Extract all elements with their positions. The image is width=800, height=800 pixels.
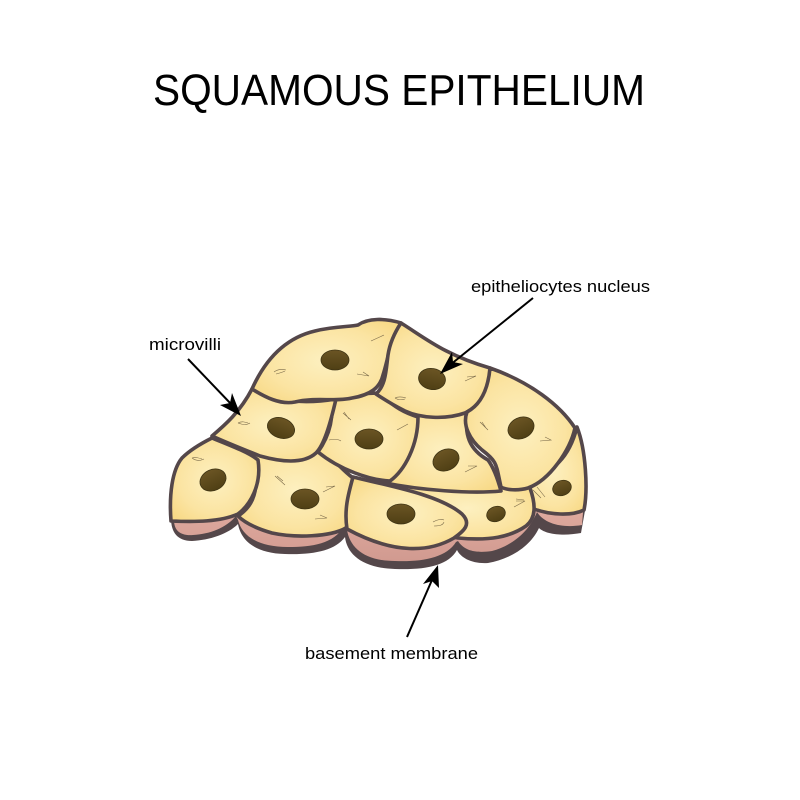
label: epitheliocytes nucleus: epitheliocytes nucleus: [471, 277, 650, 296]
basement membrane: [171, 480, 586, 569]
cell: center: [318, 393, 418, 481]
cell: middle left: [212, 389, 336, 461]
label: microvilli: microvilli: [149, 335, 221, 354]
arrow: to basement membrane: [407, 565, 439, 637]
cell: top left: [252, 319, 401, 403]
arrow: to nucleus: [440, 298, 533, 374]
cell: upper right: [465, 368, 575, 490]
cell: bottom center: [346, 477, 467, 549]
cell: bottom left of center: [238, 445, 354, 536]
label: basement membrane: basement membrane: [305, 644, 478, 663]
cell: lower right: [400, 478, 534, 539]
cell: top middle: [376, 323, 490, 417]
cell: center right: [385, 410, 501, 492]
cell: far right: [520, 427, 586, 514]
cell: far left: [170, 438, 259, 521]
arrow: to microvilli: [188, 359, 241, 416]
title: SQUAMOUS EPITHELIUM: [153, 66, 645, 115]
epithelium illustration: [170, 319, 586, 569]
